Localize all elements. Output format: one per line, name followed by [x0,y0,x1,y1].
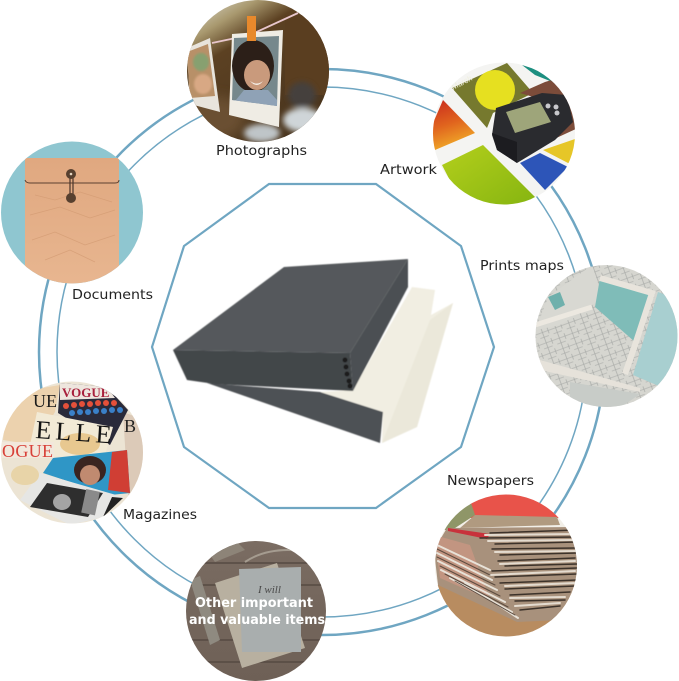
cream liner [320,287,453,443]
liner shaded panel [382,303,453,443]
panel: artwork [430,62,578,210]
panel: documents [0,140,144,286]
light paper margin [600,278,652,374]
olive calendar sheet [452,63,533,128]
backdrop [435,502,566,607]
label: Artwork: Artwork [380,162,437,178]
red calendar sheet [430,100,475,150]
March heading: March [450,74,474,92]
letter B: B [124,416,136,436]
newspaper stack [434,527,578,622]
top newspaper [460,515,560,528]
shell cover [11,465,39,485]
label: Documents: Documents [72,287,153,303]
red masthead: OGUE [2,441,53,461]
blonde cover [3,385,60,445]
panel: magazines [0,380,145,525]
label: Other important and valuable items: and valuable items [189,613,325,628]
left coloured edges [436,537,488,596]
red backdrop [470,494,559,518]
teal inset map [595,278,652,342]
metal corner rivets [342,358,352,388]
panel: newspapers [434,494,578,640]
hand [520,80,575,138]
blue vogue cover [43,450,130,495]
cover model [74,456,106,484]
panel: other important and valuable items [185,540,328,681]
lid top face [173,259,408,353]
main polaroid [229,30,283,127]
panel: photographs [185,0,330,142]
yellow calendar sheet [543,139,575,164]
desk objects [205,540,245,562]
wood table [438,585,574,636]
label: Newspapers: Newspapers [447,473,534,489]
dotted cover [58,383,128,445]
left teal inset [548,292,565,310]
red vogue cover [2,442,54,458]
kraft envelope [25,158,119,286]
map base [535,264,679,408]
left polaroid [187,38,220,112]
right beige cover [123,412,145,495]
teal calendar sheet [522,65,554,82]
yellow circle [475,70,515,110]
envelope creases [30,192,115,262]
blue grey card [239,567,301,652]
dark corner [103,497,123,517]
page edges [437,530,577,618]
panel: prints and maps [535,264,679,408]
pink masthead: VOGUE [62,385,109,400]
handwriting: I will [257,584,281,596]
label: Photographs: Photographs [216,143,307,159]
wood background [185,540,328,681]
child portrait [232,40,277,106]
lower fold [540,360,640,392]
dots [63,400,117,409]
lower map details [570,382,640,408]
UE masthead: UE [33,391,57,411]
label: Other important and valuable items [189,596,325,628]
label: Prints maps: Prints maps [480,258,564,274]
lid front face [173,350,353,391]
device screen [506,102,551,133]
inner connecting ring [57,87,587,617]
collage base [0,380,144,525]
green calendar sheet [442,145,535,210]
string tie [70,174,73,198]
label: Other important and valuable items: Other important [195,596,313,611]
product: grey archival box with cream liner [173,259,453,443]
upper button [66,169,76,179]
device buttons [546,104,560,116]
colour meter device [492,93,573,163]
white backing [433,62,576,205]
outer connecting ring [39,69,605,635]
clothes peg [247,16,256,41]
photo background [187,0,329,142]
pale teal sheet [633,292,678,386]
ELLE masthead: ELLE [35,415,112,449]
string [212,13,298,43]
black and white magazine [20,473,123,525]
beige paper [215,563,305,668]
ELLE cover [30,412,113,457]
blue calendar sheet [520,153,568,190]
envelope flap line [25,180,119,183]
central decagon frame [152,184,494,508]
label: Magazines: Magazines [123,507,197,523]
blurred person [244,82,323,142]
teal background [0,140,144,284]
lower button [66,193,76,203]
map sheet fold top left [536,266,598,329]
lid right side [350,259,408,391]
red strip [448,528,490,539]
box base [207,383,383,443]
